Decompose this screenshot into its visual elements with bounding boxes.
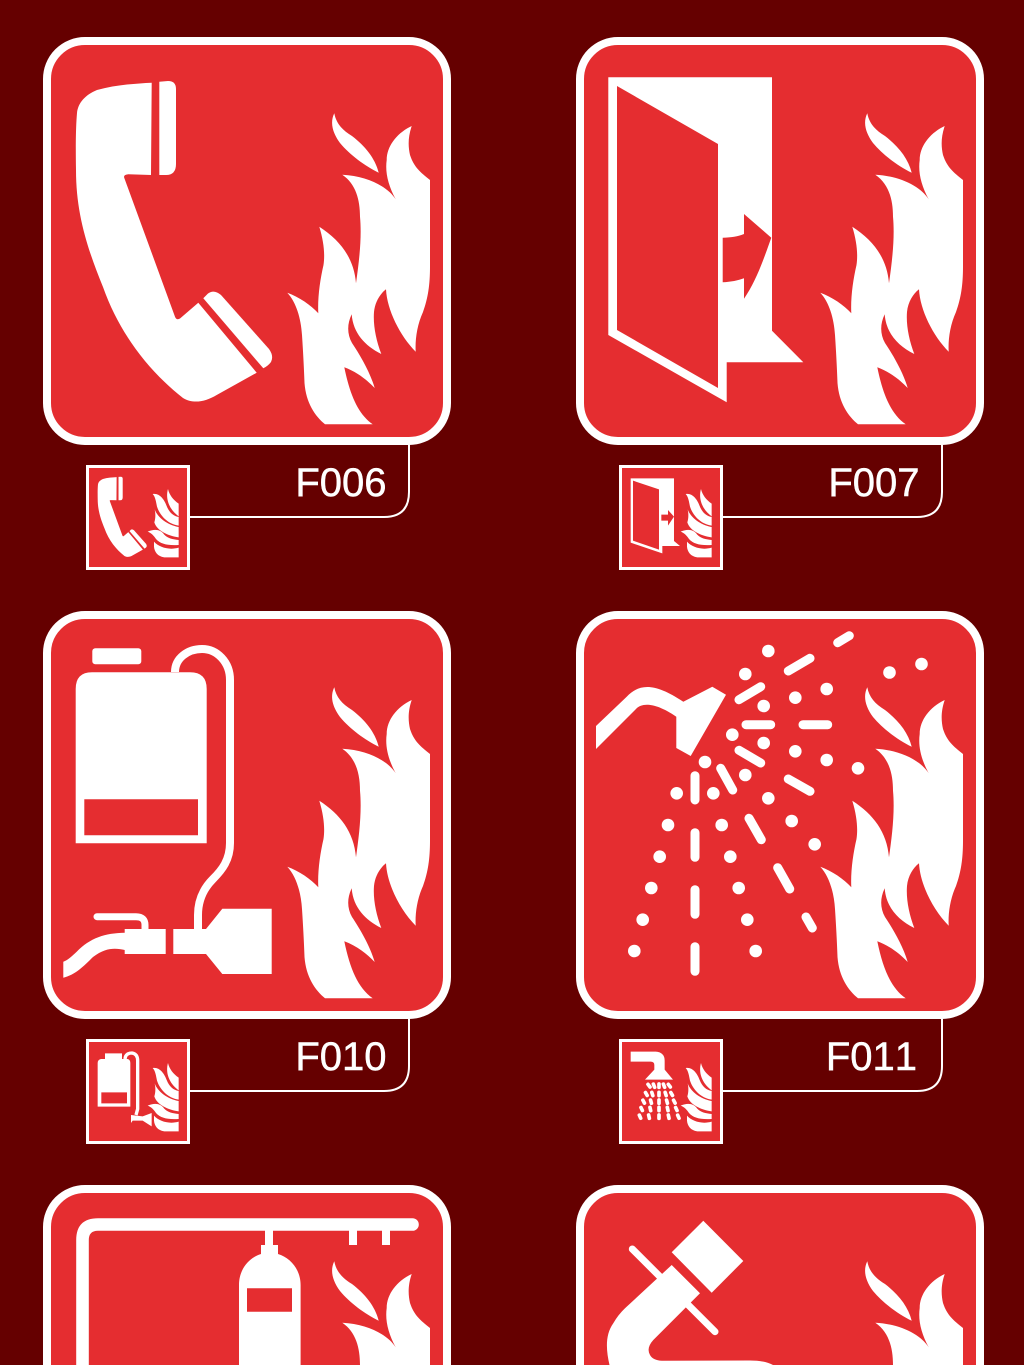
code label: F007 bbox=[828, 461, 920, 505]
small sign bbox=[620, 1040, 722, 1142]
sign background bbox=[47, 1189, 447, 1365]
icon: telephone bbox=[76, 81, 272, 402]
panel: fixed extinguishing system sign (cropped) bbox=[47, 1189, 447, 1365]
icon: nozzle and hose bbox=[607, 1221, 773, 1365]
small sign bbox=[88, 1040, 188, 1142]
panel: F010 extinguishing equipment bbox=[47, 615, 447, 1142]
icon: flame bbox=[287, 113, 430, 424]
panel: F006 fire telephone bbox=[47, 41, 447, 568]
icon: foam tank with hose and nozzle bbox=[63, 648, 272, 978]
icon: flame bbox=[820, 113, 963, 424]
icon: flame bbox=[820, 687, 963, 998]
icon: flame bbox=[865, 1261, 963, 1365]
panel: fire hose nozzle sign (cropped) bbox=[580, 1189, 980, 1365]
sign background bbox=[580, 1189, 980, 1365]
connector line bbox=[723, 1019, 942, 1091]
code label: F010 bbox=[295, 1035, 386, 1079]
panel: F007 fire door bbox=[580, 41, 980, 568]
code label: F006 bbox=[295, 461, 386, 505]
sign background bbox=[47, 615, 447, 1015]
connector line bbox=[190, 1019, 409, 1091]
icon: flame bbox=[287, 687, 430, 998]
icon: sprinkler head bbox=[596, 687, 726, 756]
sign background bbox=[47, 41, 447, 441]
sign background bbox=[580, 615, 980, 1015]
connector line bbox=[190, 445, 409, 517]
connector line bbox=[723, 445, 942, 517]
small sign bbox=[620, 466, 722, 568]
icon: door with arrow bbox=[608, 77, 803, 402]
code label: F011 bbox=[826, 1035, 917, 1079]
small sign bbox=[88, 466, 188, 568]
sign background bbox=[580, 41, 980, 441]
icon: flame bbox=[332, 1261, 430, 1365]
icon: gas cylinder with pipework bbox=[76, 1218, 419, 1365]
icon: water spray bbox=[628, 636, 928, 971]
panel: F011 sprinkler bbox=[580, 615, 980, 1142]
